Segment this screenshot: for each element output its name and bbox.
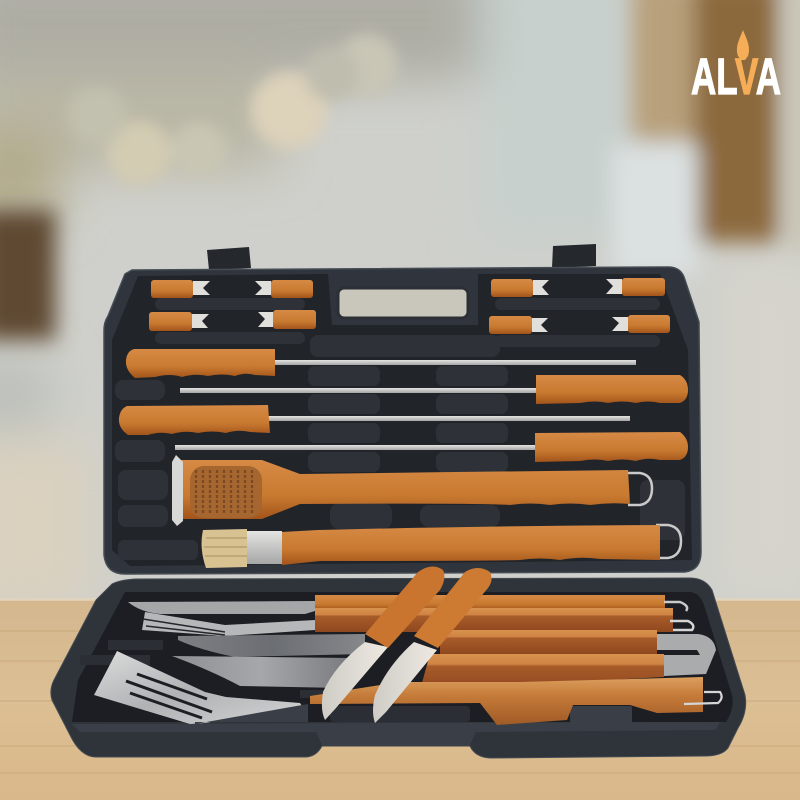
long skewers (119, 349, 688, 462)
skewer 2 (180, 375, 688, 404)
logo flame (737, 30, 749, 60)
paring knives (322, 566, 492, 723)
upper shell (104, 267, 701, 574)
brush hook (628, 473, 652, 505)
knife 1 (322, 566, 444, 720)
scraper blade (172, 455, 183, 526)
handle 3 (440, 630, 657, 654)
knife and fork blades (128, 601, 365, 688)
handle 2 (315, 608, 673, 632)
hook 5 (684, 692, 722, 704)
handle 5 (310, 677, 703, 725)
wooden handles stack (310, 595, 722, 725)
hook 2 (670, 621, 693, 630)
tray floor slats (80, 640, 632, 724)
ALVA logo (691, 30, 781, 105)
wooden table (0, 598, 800, 800)
lower case tray (51, 578, 746, 758)
skewer 3 (119, 405, 630, 435)
lower inner bed (72, 592, 733, 722)
hook 1 (664, 602, 687, 611)
wire bristles (190, 466, 262, 518)
skewer 4 (175, 432, 688, 462)
spatula (94, 651, 308, 724)
spatula cover (195, 704, 308, 724)
brush handle (180, 460, 630, 519)
short skewer handles (149, 278, 670, 334)
lower shell (51, 578, 746, 758)
upper case tray (104, 244, 701, 574)
lower shell front lip (72, 722, 720, 745)
bristles (202, 529, 247, 568)
spatula slots (126, 674, 212, 718)
skewer 1 (126, 349, 636, 378)
moulded ribs (115, 298, 685, 560)
blurred room background (0, 0, 800, 620)
grill brush (172, 455, 652, 526)
handle 4 (420, 654, 664, 690)
ferrule (247, 531, 282, 564)
basting brush (202, 525, 681, 568)
carving knife (128, 601, 315, 614)
basting handle (282, 525, 660, 565)
basting hook (656, 525, 681, 558)
knife 2 (373, 568, 492, 723)
tongs loop (657, 634, 716, 676)
inner dark bed (112, 274, 692, 566)
logo wordmark: ALVA (691, 48, 781, 105)
tong arm 1 (178, 634, 365, 657)
fork (142, 612, 315, 636)
carrying handle cutout (338, 288, 468, 318)
latches (207, 244, 596, 270)
tong arm 2 (172, 656, 350, 688)
handle 1 (315, 595, 665, 610)
